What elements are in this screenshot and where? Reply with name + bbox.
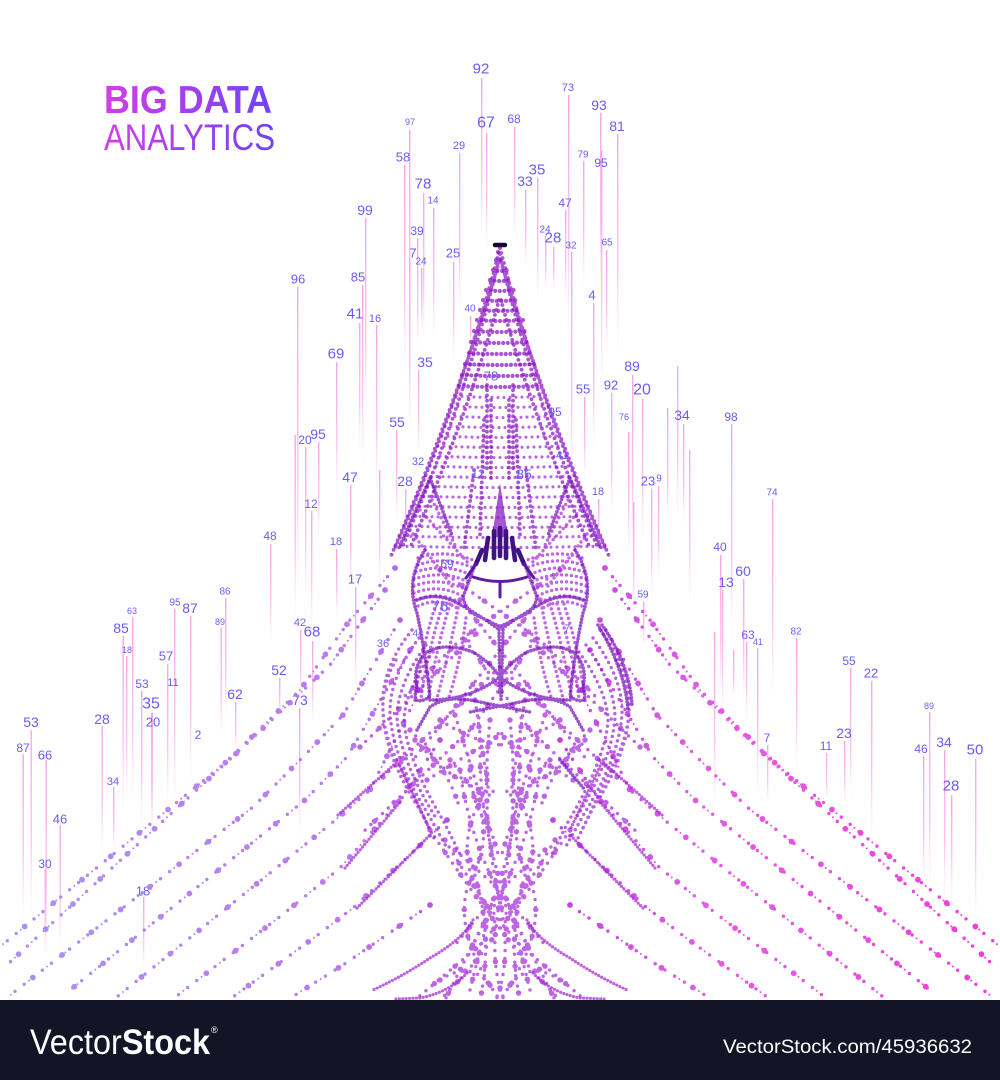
shoulders xyxy=(410,500,590,702)
floating data numbers with fading spikes: left cluster: 28 xyxy=(94,711,110,727)
floating data numbers with fading spikes: top cluster: 29 xyxy=(453,140,465,152)
floating data numbers with fading spikes: top cluster: 7 xyxy=(409,246,417,260)
floating data numbers with fading spikes: right cluster: 34 xyxy=(936,734,952,750)
floating data numbers with fading spikes: top cluster: 68 xyxy=(507,112,521,126)
floating data numbers with fading spikes: left cluster: 99 xyxy=(357,202,373,218)
floating data numbers with fading spikes: left cluster: 63 xyxy=(127,606,137,616)
floating data numbers with fading spikes: top cluster: 32 xyxy=(412,456,424,468)
cone rows xyxy=(395,252,605,548)
floating data numbers with fading spikes: right cluster: 41 xyxy=(753,637,763,647)
floating data numbers with fading spikes: top cluster: 40 xyxy=(464,304,476,314)
floating data numbers with fading spikes: left cluster: 85 xyxy=(351,270,365,284)
floating data numbers with fading spikes: right cluster: 76 xyxy=(619,412,629,422)
floating data numbers with fading spikes: left cluster: 87 xyxy=(16,741,30,755)
floating data numbers with fading spikes: left cluster: 18 xyxy=(136,884,150,898)
floating data numbers with fading spikes: left cluster: 36 xyxy=(377,638,389,650)
long dotted lines: right fan xyxy=(553,568,998,997)
floating data numbers with fading spikes: top cluster: 65 xyxy=(601,238,613,248)
floating data numbers with fading spikes: left cluster: 20 xyxy=(146,714,160,730)
overlaid numbers on the figure: 69 xyxy=(440,557,454,571)
floating data numbers with fading spikes: right cluster: 18 xyxy=(592,486,604,498)
floating data numbers with fading spikes: top cluster xyxy=(389,60,625,544)
floating data numbers with fading spikes: left cluster: 68 xyxy=(304,624,320,640)
floating data numbers with fading spikes: top cluster: 28 xyxy=(545,230,561,246)
floating data numbers with fading spikes: left cluster: 34 xyxy=(107,776,119,788)
floating data numbers with fading spikes: left cluster: 96 xyxy=(291,272,305,286)
floating data numbers with fading spikes: left cluster: 17 xyxy=(348,572,362,586)
floating data numbers with fading spikes: left cluster: 2 xyxy=(195,728,202,742)
floating data numbers with fading spikes: right cluster xyxy=(576,358,983,924)
dark crown xyxy=(466,483,534,597)
floating data numbers with fading spikes: left cluster: 57 xyxy=(159,648,173,664)
long dotted lines: left fan xyxy=(2,568,447,997)
floating data numbers with fading spikes: left cluster: 11 xyxy=(167,677,179,689)
title: BIG DATA xyxy=(104,79,272,122)
floating data numbers with fading spikes: top cluster: 24 xyxy=(415,256,427,268)
dark ribbons xyxy=(398,478,632,790)
floating data numbers with fading spikes: top cluster: 32 xyxy=(565,240,577,252)
floating data numbers with fading spikes: left cluster: 18 xyxy=(122,645,132,655)
floating data numbers with fading spikes: right cluster: 11 xyxy=(820,739,833,753)
floating data numbers with fading spikes: right cluster: 22 xyxy=(864,666,878,680)
floating data numbers with fading spikes: top cluster: 4 xyxy=(588,288,596,302)
floating data numbers with fading spikes: left cluster: 69 xyxy=(328,346,344,362)
floating data numbers with fading spikes: top cluster: 78 xyxy=(415,176,431,192)
floating data numbers with fading spikes: right cluster: 59 xyxy=(637,590,649,600)
floating data numbers with fading spikes: top cluster: 14 xyxy=(427,196,439,206)
floating data numbers with fading spikes: right cluster: 60 xyxy=(735,563,751,579)
floating data numbers with fading spikes: top cluster: 93 xyxy=(591,97,607,113)
overlaid numbers on the figure xyxy=(412,368,570,640)
footer logo: VectorStock xyxy=(30,1023,210,1062)
cone tip xyxy=(495,243,505,247)
floating data numbers with fading spikes: top cluster: 81 xyxy=(609,118,625,134)
floating data numbers with fading spikes: top cluster: 79 xyxy=(577,150,589,160)
floating data numbers with fading spikes: top cluster: 25 xyxy=(446,246,460,260)
floating data numbers with fading spikes: left cluster: 42 xyxy=(294,617,306,629)
overlaid numbers on the figure: 78 xyxy=(484,368,498,384)
outer bulge bands xyxy=(383,630,629,858)
overlaid numbers on the figure: 85 xyxy=(516,466,532,482)
floating data numbers with fading spikes: top cluster: 95 xyxy=(594,156,608,170)
floating data numbers with fading spikes: left cluster: 85 xyxy=(113,620,129,636)
footer bar xyxy=(0,1000,1000,1080)
floating data numbers with fading spikes: right cluster: 13 xyxy=(718,574,734,590)
inner body tracks xyxy=(360,570,640,1000)
central dotted data figure xyxy=(338,245,662,1000)
overlaid numbers on the figure: 7 xyxy=(564,623,570,635)
floating data numbers with fading spikes: top cluster: 24 xyxy=(539,224,551,236)
floating data numbers with fading spikes: left cluster: 30 xyxy=(38,857,52,871)
floating data numbers with fading spikes: top cluster: 35 xyxy=(529,162,545,178)
floating data numbers with fading spikes: top cluster: 39 xyxy=(410,224,424,238)
floating data numbers with fading spikes: right cluster: 98 xyxy=(724,410,738,424)
overlaid numbers on the figure: 95 xyxy=(548,405,562,419)
footer url: VectorStock.com/45936632 xyxy=(723,1037,972,1058)
floating data numbers with fading spikes: right cluster: 50 xyxy=(967,742,983,758)
cone edges xyxy=(391,248,609,556)
floating data numbers with fading spikes: left cluster: 20 xyxy=(298,433,312,447)
floating data numbers with fading spikes: left cluster: 48 xyxy=(263,529,277,543)
floating data numbers with fading spikes: left cluster xyxy=(16,202,389,972)
floating data numbers with fading spikes: left cluster: 73 xyxy=(292,692,308,708)
floating data numbers with fading spikes: top cluster: 67 xyxy=(477,114,495,132)
floating data numbers with fading spikes: right cluster: 34 xyxy=(674,407,690,423)
floating data numbers with fading spikes: left cluster: 41 xyxy=(347,306,363,322)
floating data numbers with fading spikes: right cluster: 46 xyxy=(914,742,928,756)
floating data numbers with fading spikes: left cluster: 46 xyxy=(53,812,67,826)
floating data numbers with fading spikes: right cluster: 89 xyxy=(624,358,640,374)
floating data numbers with fading spikes: left cluster: 66 xyxy=(38,748,52,762)
floating data numbers with fading spikes: left cluster: 52 xyxy=(271,662,287,678)
floating data numbers with fading spikes: top cluster: 55 xyxy=(389,414,405,430)
floating data numbers with fading spikes: right cluster: 9 xyxy=(656,474,662,484)
floating data numbers with fading spikes: right cluster: 82 xyxy=(790,626,802,638)
lower swooshes xyxy=(338,760,662,999)
floating data numbers with fading spikes: top cluster: 35 xyxy=(417,354,433,370)
floating data numbers with fading spikes: left cluster: 89 xyxy=(215,617,225,627)
floating data numbers with fading spikes: top cluster: 28 xyxy=(397,473,413,489)
overlaid numbers on the figure: 12 xyxy=(471,467,485,481)
floating data numbers with fading spikes: right cluster: 55 xyxy=(576,382,590,396)
floating data numbers with fading spikes: right cluster: 40 xyxy=(713,540,727,554)
floating data numbers with fading spikes: right cluster: 74 xyxy=(766,488,778,498)
floating data numbers with fading spikes: left cluster: 95 xyxy=(169,598,181,608)
floating data numbers with fading spikes: left cluster: 53 xyxy=(23,714,39,730)
overlaid numbers on the figure: 41 xyxy=(556,450,568,462)
floating data numbers with fading spikes: top cluster: 73 xyxy=(562,82,574,94)
floating data numbers with fading spikes: top cluster: 92 xyxy=(473,60,489,78)
floating data numbers with fading spikes: left cluster: 62 xyxy=(227,686,243,702)
floating data numbers with fading spikes: left cluster: 86 xyxy=(219,586,231,598)
floating data numbers with fading spikes: top cluster: 33 xyxy=(517,173,533,189)
floating data numbers with fading spikes: right cluster: 28 xyxy=(943,778,959,794)
overlaid numbers on the figure: 76 xyxy=(432,598,448,616)
title: ANALYTICS xyxy=(104,117,275,158)
floating data numbers with fading spikes: left cluster: 16 xyxy=(369,313,381,325)
floating data numbers with fading spikes: top cluster: 58 xyxy=(396,150,410,164)
floating data numbers with fading spikes: top cluster: 97 xyxy=(405,117,415,127)
floating data numbers with fading spikes: right cluster: 89 xyxy=(924,701,934,711)
floating data numbers with fading spikes: left cluster: 47 xyxy=(342,469,358,485)
overlaid numbers on the figure: 44 xyxy=(412,628,424,640)
floating data numbers with fading spikes: right cluster: 20 xyxy=(633,382,651,398)
floating data numbers with fading spikes: left cluster: 87 xyxy=(182,600,198,616)
floating data numbers with fading spikes: left cluster: 18 xyxy=(330,536,342,548)
floating data numbers with fading spikes: right cluster: 7 xyxy=(764,731,771,745)
floating data numbers with fading spikes: right cluster: 23 xyxy=(641,474,655,488)
floating data numbers with fading spikes: left cluster: 53 xyxy=(135,677,149,691)
floating data numbers with fading spikes: left cluster: 35 xyxy=(142,696,160,712)
floating data numbers with fading spikes: top cluster: 47 xyxy=(558,196,572,210)
title xyxy=(104,79,275,158)
registered mark: ® xyxy=(211,1025,218,1035)
floating data numbers with fading spikes: right cluster: 23 xyxy=(836,725,852,741)
floating data numbers with fading spikes: left cluster: 12 xyxy=(304,497,318,511)
floating data numbers with fading spikes: left cluster: 95 xyxy=(310,426,326,442)
floating data numbers with fading spikes: right cluster: 63 xyxy=(741,628,755,642)
floating data numbers with fading spikes: right cluster: 92 xyxy=(604,378,618,392)
floating data numbers with fading spikes: right cluster: 55 xyxy=(842,654,856,668)
